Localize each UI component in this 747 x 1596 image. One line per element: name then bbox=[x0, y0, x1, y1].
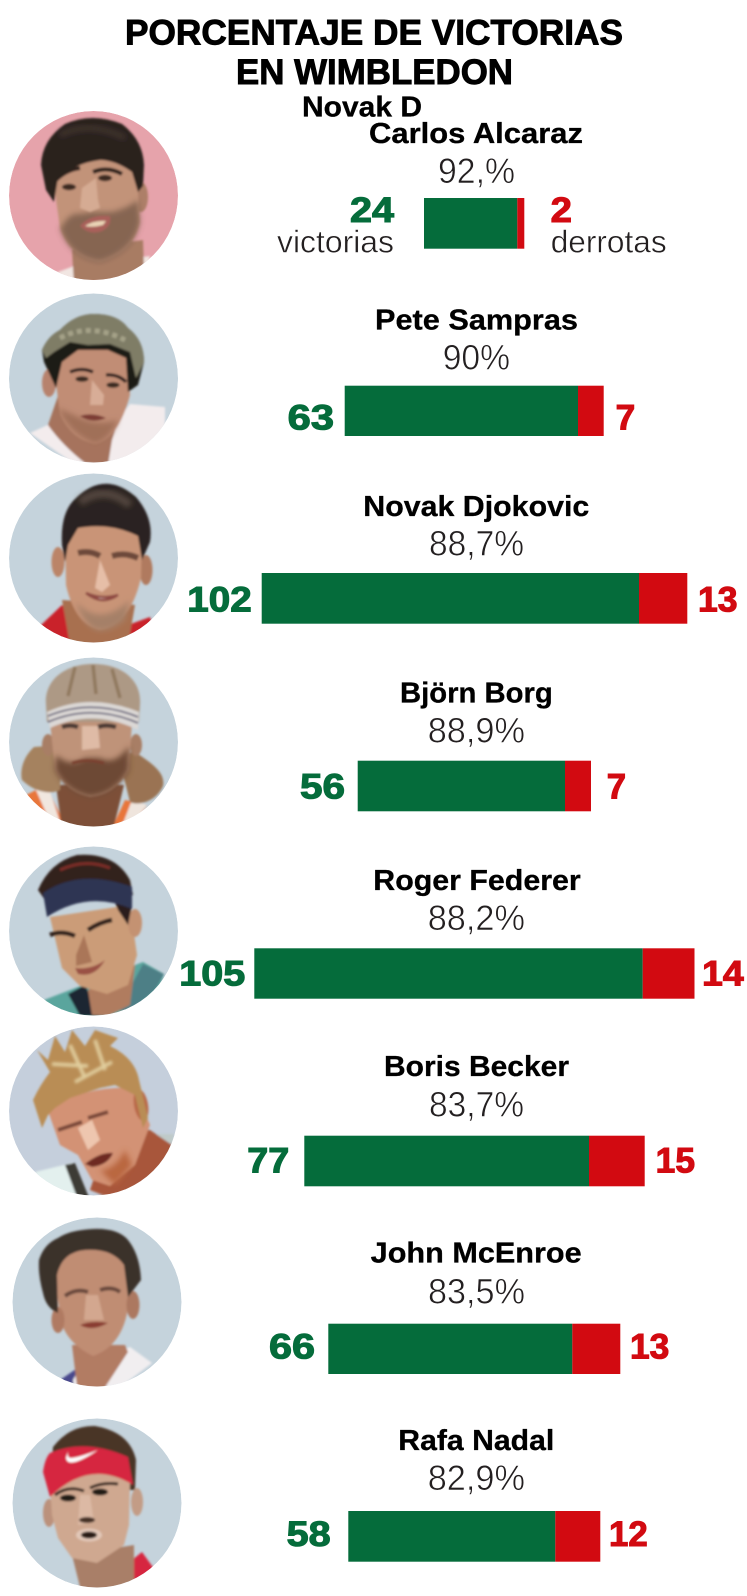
percentage: 88,2% bbox=[428, 898, 525, 938]
percentage: 88,9% bbox=[428, 711, 525, 751]
title: PORCENTAJE DE VICTORIAS bbox=[125, 13, 623, 53]
defeats count: 13 bbox=[698, 581, 738, 620]
stacked bar bbox=[424, 198, 524, 249]
portrait: Roger Federer bbox=[9, 846, 178, 1020]
defeats count: 12 bbox=[609, 1515, 648, 1554]
name: Carlos Alcaraz bbox=[369, 118, 583, 150]
stacked bar bbox=[348, 1511, 600, 1562]
name: Roger Federer bbox=[373, 865, 581, 897]
victories count: 63 bbox=[288, 398, 334, 437]
victories count: 102 bbox=[187, 581, 252, 620]
label: derrotas: derrotas bbox=[551, 224, 667, 260]
victories count: 24 bbox=[350, 191, 395, 230]
stacked bar bbox=[345, 386, 604, 436]
victories count: 56 bbox=[300, 767, 345, 806]
defeats count: 7 bbox=[607, 767, 626, 806]
defeats count: 14 bbox=[702, 955, 744, 994]
name: Rafa Nadal bbox=[398, 1425, 554, 1457]
name: Björn Borg bbox=[400, 678, 553, 710]
percentage: 83,7% bbox=[429, 1085, 524, 1125]
row: John McEnroe bbox=[12, 1218, 669, 1395]
victories count: 66 bbox=[269, 1327, 315, 1366]
stacked bar bbox=[304, 1136, 645, 1186]
row: Pete Sampras bbox=[9, 294, 635, 468]
portrait: Björn Borg bbox=[9, 658, 178, 830]
stacked bar bbox=[358, 761, 591, 811]
title bbox=[125, 13, 623, 92]
name: John McEnroe bbox=[371, 1238, 582, 1270]
percentage: 88,7% bbox=[429, 524, 524, 564]
defeats count: 13 bbox=[630, 1327, 669, 1366]
stacked bar bbox=[328, 1324, 620, 1374]
stacked bar bbox=[254, 948, 695, 999]
victories count: 105 bbox=[179, 955, 245, 994]
percentage: 92,% bbox=[438, 151, 515, 191]
percentage: 82,9% bbox=[428, 1458, 525, 1498]
victories count: 77 bbox=[247, 1142, 289, 1181]
row: Roger Federer bbox=[9, 846, 744, 1020]
portrait: Boris Becker bbox=[9, 1026, 178, 1200]
defeats count: 15 bbox=[656, 1142, 695, 1181]
name: Novak Djokovic bbox=[363, 491, 589, 523]
portrait: Novak Djokovic bbox=[9, 474, 178, 645]
defeats count: 2 bbox=[551, 191, 572, 230]
row: Boris Becker bbox=[9, 1026, 695, 1200]
percentage: 90% bbox=[443, 337, 510, 377]
stacked bar bbox=[262, 573, 687, 624]
percentage: 83,5% bbox=[428, 1271, 525, 1311]
defeats count: 7 bbox=[616, 398, 635, 437]
name: Pete Sampras bbox=[375, 304, 578, 336]
label: victorias: victorias bbox=[277, 224, 394, 260]
row: Carlos Alcaraz bbox=[9, 111, 667, 285]
portrait: Carlos Alcaraz bbox=[9, 111, 178, 285]
title: EN WIMBLEDON bbox=[236, 52, 513, 92]
portrait: Pete Sampras bbox=[9, 294, 178, 468]
portrait: Rafa Nadal bbox=[12, 1418, 182, 1595]
row: Björn Borg bbox=[9, 658, 626, 830]
stray truncated label: Novak D: Novak D bbox=[302, 92, 422, 124]
row: Rafa Nadal bbox=[12, 1418, 648, 1595]
portrait: John McEnroe bbox=[12, 1218, 182, 1395]
row: Novak Djokovic bbox=[9, 474, 738, 645]
victories count: 58 bbox=[287, 1515, 331, 1554]
name: Boris Becker bbox=[384, 1051, 569, 1083]
